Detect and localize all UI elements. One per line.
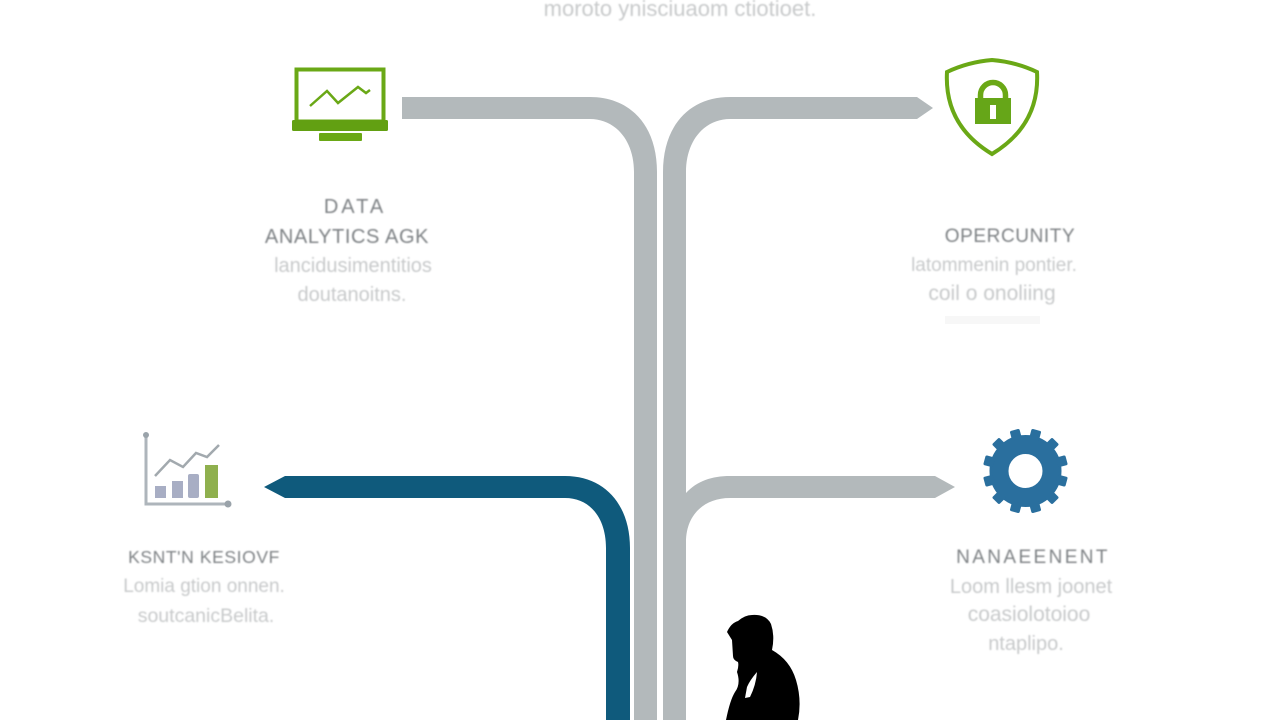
icon: gear xyxy=(983,429,1068,513)
icon: monitor with line chart xyxy=(292,70,388,141)
description line two: soutcanicBelita. xyxy=(138,605,274,627)
figure: silhouette of thinking man xyxy=(726,615,800,720)
heading: security: OPERCUNITY xyxy=(945,226,1075,247)
description line one: Loom llesm joonet xyxy=(950,576,1112,598)
arrow: lower left dark branch xyxy=(264,476,630,720)
description line one: lancidusimentitios xyxy=(274,255,432,277)
arrow: top right branch xyxy=(663,97,933,720)
heading: key insight: KSNT'N KESIOVF xyxy=(128,547,280,567)
description line two: coasiolotoioo xyxy=(968,603,1090,626)
description line two: coil o onoliing xyxy=(928,282,1056,305)
icon: shield with padlock xyxy=(947,60,1037,154)
arrow: lower right branch xyxy=(686,476,955,542)
heading: analytics: ANALYTICS AGK xyxy=(265,226,429,248)
icon: bar and line chart xyxy=(143,432,232,508)
text block: security xyxy=(911,226,1077,305)
heading: data: DATA xyxy=(324,196,386,218)
arrow: top left branch xyxy=(402,97,657,720)
description line one: Lomia gtion onnen. xyxy=(123,576,285,597)
heading: management: NANAEENENT xyxy=(956,547,1110,568)
text block: data analytics xyxy=(264,196,432,306)
decorative faint band xyxy=(945,316,1040,324)
description line three: ntaplipo. xyxy=(988,633,1064,655)
text block: management xyxy=(950,547,1112,655)
text block: key insight xyxy=(123,547,285,627)
description line one: latommenin pontier. xyxy=(911,255,1077,276)
description line two: doutanoitns. xyxy=(298,284,406,306)
